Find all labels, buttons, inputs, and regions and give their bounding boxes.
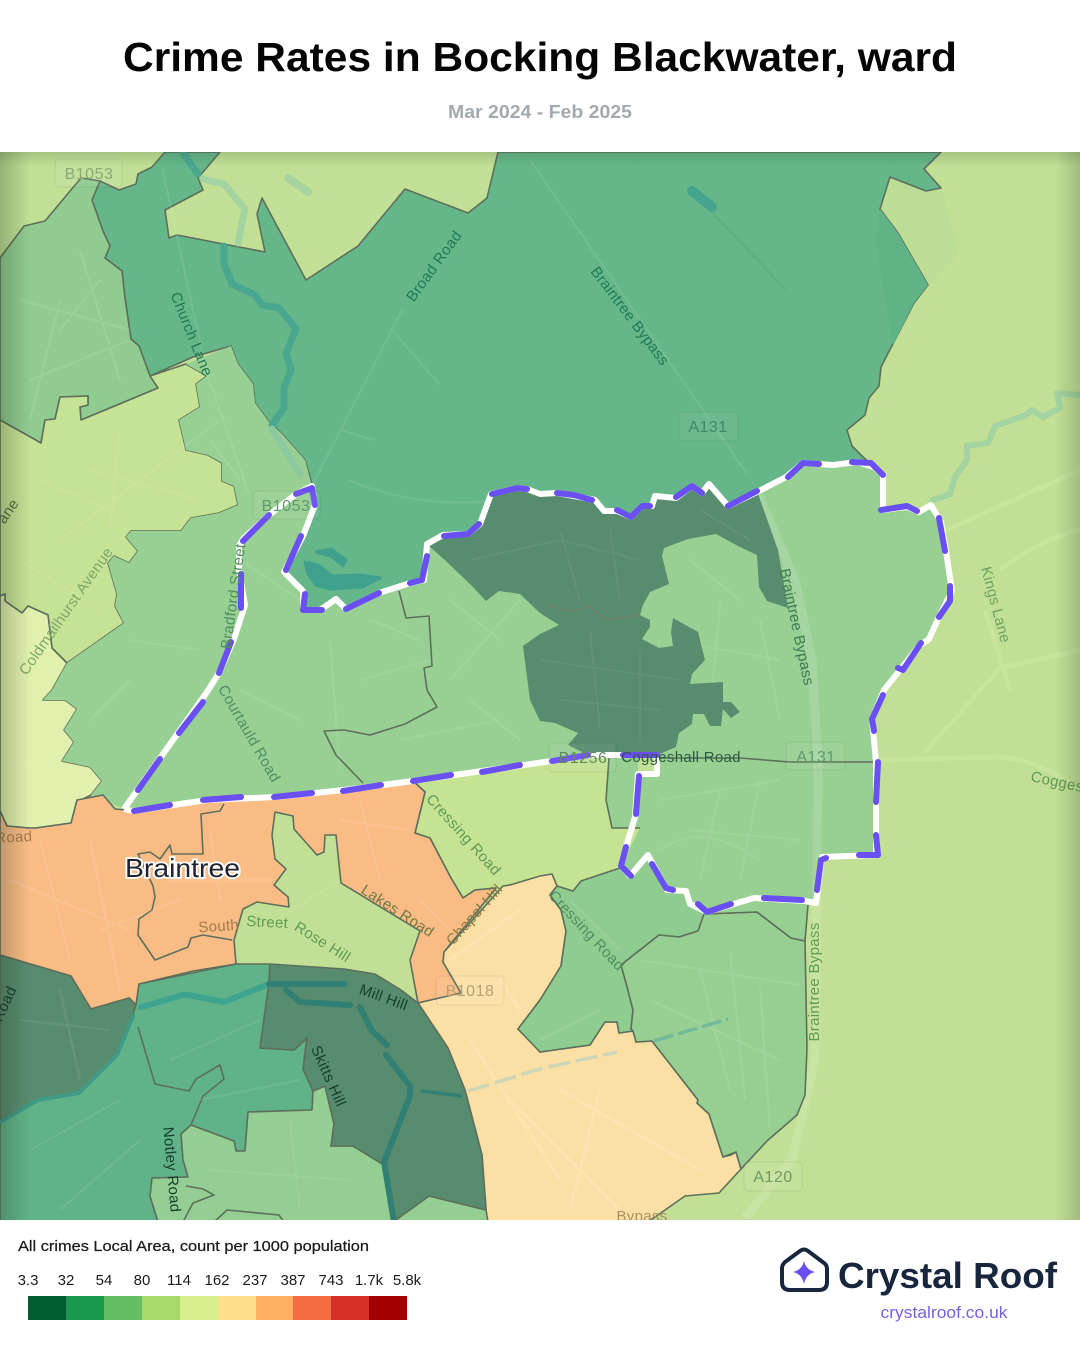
shield B1256 <box>549 743 616 772</box>
south west street texture <box>20 990 350 1210</box>
region: Coldmailhurst Avenue <box>0 364 238 663</box>
boundary inside dark zone <box>550 606 640 620</box>
patch: mid green strip near Coggeshall Road <box>606 758 638 828</box>
legend scale values <box>18 1272 422 1289</box>
patch: Cressing Road area inside ward notch <box>413 758 640 898</box>
street name labels <box>0 228 1080 1225</box>
patch: mid green wedge by the bypass <box>707 898 808 941</box>
street name labels: South <box>198 917 240 936</box>
region: mid green south east <box>621 912 807 1169</box>
dark zone street texture <box>470 510 750 740</box>
ward internal boundaries <box>324 591 876 898</box>
legend scale values: 54 <box>96 1272 112 1289</box>
legend scale values: 1.7k <box>355 1272 384 1289</box>
shield A131 east <box>786 742 845 770</box>
shield B1053 north <box>55 159 122 187</box>
logo: house icon with star <box>782 1250 827 1290</box>
street name labels: Courtauld Road <box>214 682 284 785</box>
shield A120 <box>744 1162 802 1191</box>
legend scale values: 237 <box>242 1272 268 1289</box>
region: pale west area <box>0 594 102 833</box>
shield B1018 <box>436 976 504 1005</box>
region: mid green Cressing Road south <box>518 855 707 1052</box>
road shields <box>55 159 845 1191</box>
street name labels: Cressing Road <box>545 887 628 974</box>
patch: lighter field north east <box>880 177 958 285</box>
peach street texture <box>10 800 450 990</box>
street name labels: Bradford Street <box>218 542 249 650</box>
street name labels: Rose Hill <box>291 918 353 966</box>
street name labels: Braintree Bypass <box>806 922 823 1042</box>
peach internal boundaries <box>138 804 232 960</box>
website link: crystalroof.co.uk <box>880 1304 1008 1322</box>
header <box>123 34 957 122</box>
water: southern river <box>0 984 461 1222</box>
shield B1053 north: B1053 <box>65 166 113 183</box>
street name labels: Coggeshall Road <box>621 749 741 766</box>
boundary inside green region <box>138 1027 224 1125</box>
region: high dark central zone <box>427 484 788 755</box>
street name labels: Cressing Road <box>423 791 504 879</box>
local road network <box>20 160 800 980</box>
water: stream and ponds north <box>183 153 1080 500</box>
legend scale values: 32 <box>58 1272 74 1289</box>
legend scale values: 5.8k <box>393 1272 422 1289</box>
legend scale values: 387 <box>280 1272 306 1289</box>
patch: darker strip in north region <box>876 209 928 345</box>
street name labels: Kings Lane <box>977 565 1014 645</box>
legend colour bar <box>28 1296 407 1320</box>
region: north west residential <box>0 178 158 443</box>
cream stream <box>468 1052 617 1091</box>
shield A131 north: A131 <box>688 419 728 436</box>
boundaries inside mid green region <box>183 1186 214 1222</box>
subtitle: date range: Mar 2024 - Feb 2025 <box>448 102 632 122</box>
shield A131 east: A131 <box>796 749 836 766</box>
footer <box>18 1238 1058 1322</box>
region: dark south west <box>0 955 138 1120</box>
place label: Braintree: Braintree <box>125 853 240 883</box>
region: cream south east <box>418 874 741 1222</box>
region: mid green west and ward interior <box>43 346 952 912</box>
street name labels: Skitts Hill <box>307 1043 349 1109</box>
region: Braintree town centre peach <box>0 781 496 1009</box>
street name labels: Notley Road <box>159 1126 184 1213</box>
water: lake <box>305 549 380 589</box>
legend scale values: 743 <box>318 1272 344 1289</box>
choropleth map <box>0 152 1080 1220</box>
road: eastern A131 and Coggeshall Road <box>880 470 1080 790</box>
shield B1053 ward <box>253 491 320 519</box>
cream streets <box>450 910 700 1210</box>
region: dark Skitts Hill <box>260 964 486 1222</box>
region: north large rural area <box>92 152 941 610</box>
street name labels: Mill Hill <box>357 981 410 1014</box>
road: Braintree Bypass corridor <box>745 491 818 1218</box>
legend scale values: 114 <box>167 1272 191 1289</box>
map edge vignette <box>0 152 1080 1220</box>
street name labels: Street <box>246 913 289 932</box>
legend title: All crimes Local Area, count per 1000 population <box>18 1238 369 1255</box>
shield B1018: B1018 <box>446 983 494 1000</box>
region: mid green Notley Road <box>150 1086 488 1222</box>
legend scale values: 3.3 <box>18 1272 38 1289</box>
street name labels: Braintree Bypass <box>587 264 672 369</box>
south east streets <box>540 900 800 1130</box>
region: green south west <box>0 964 313 1222</box>
shield B1256: B1256 <box>559 750 607 767</box>
street name labels: Chapel Hill <box>443 881 506 949</box>
ward boundary: white base <box>124 462 952 912</box>
shield A131 north <box>679 412 738 441</box>
title: Crime Rates in Bocking Blackwater, ward <box>123 34 957 80</box>
street name labels: Lakes Road <box>358 881 437 941</box>
street name labels: Coldmailhurst Avenue <box>16 544 117 678</box>
logo wordmark: Crystal Roof <box>838 1255 1058 1296</box>
stream south east <box>654 1019 728 1041</box>
legend scale values: 80 <box>134 1272 150 1289</box>
street name labels: Braintree Bypass <box>776 567 817 687</box>
street name labels: Broad Road <box>403 228 466 305</box>
ward boundary: purple dashes <box>134 462 950 912</box>
street name labels: Church Lane <box>167 290 216 379</box>
map base: open countryside <box>0 152 1080 1220</box>
legend scale values: 162 <box>204 1272 230 1289</box>
shield A120: A120 <box>753 1169 793 1186</box>
shield B1053 ward: B1053 <box>262 498 310 515</box>
